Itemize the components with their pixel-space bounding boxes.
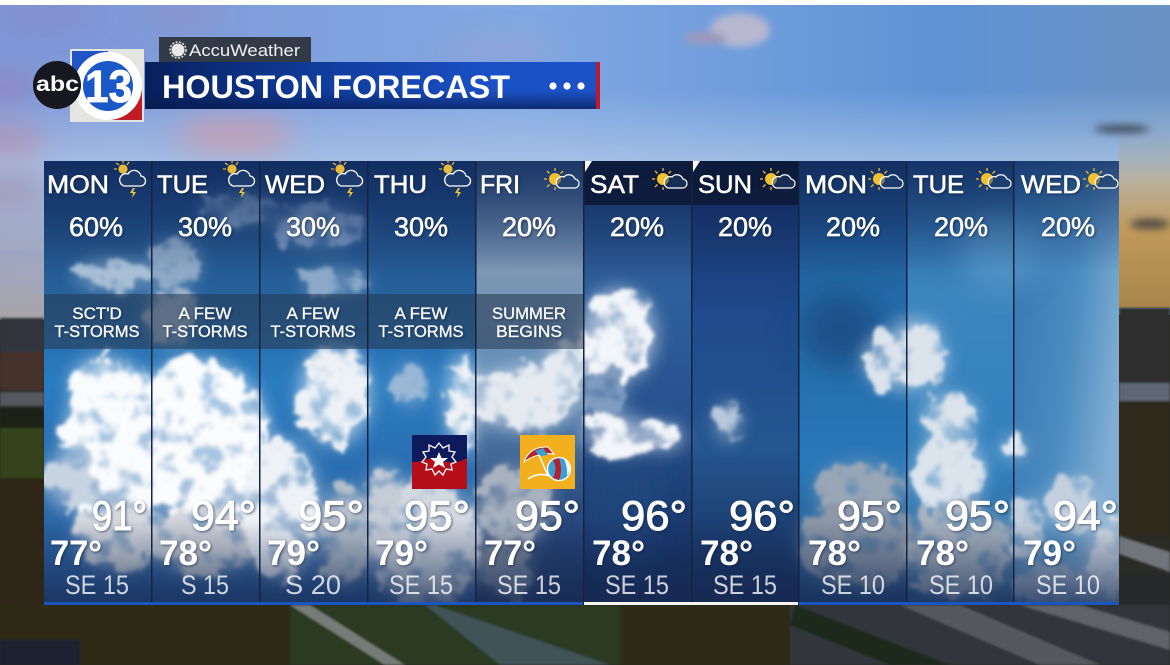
high temperatures: 95° [837, 492, 902, 539]
low temperatures: 78° [159, 534, 212, 573]
low temperatures: 79° [375, 534, 428, 573]
condition labels: T-STORMS [162, 322, 248, 341]
low temperatures: 79° [1023, 534, 1076, 573]
panel clouds [44, 161, 1124, 609]
high temperatures: 94° [1053, 492, 1118, 539]
day labels: MON [47, 171, 109, 199]
top white strip [0, 0, 1170, 5]
day labels: SAT [590, 171, 639, 199]
condition labels: T-STORMS [270, 322, 356, 341]
precipitation chances: 30% [286, 212, 340, 242]
title banner: HOUSTON FORECAST [162, 69, 510, 105]
low temperatures: 78° [592, 534, 645, 573]
abc13 logo: 13 [85, 61, 132, 112]
day labels: WED [1021, 171, 1081, 199]
condition strip background [44, 294, 583, 349]
low temperatures: 78° [700, 534, 753, 573]
abc13 logo [33, 49, 144, 122]
condition labels: T-STORMS [54, 322, 140, 341]
high temperatures: 96° [729, 492, 795, 539]
precipitation chances: 20% [610, 212, 664, 242]
condition labels: T-STORMS [378, 322, 464, 341]
day labels: FRI [480, 171, 520, 199]
condition labels [54, 304, 566, 341]
wind [65, 570, 1100, 600]
condition labels: A FEW [287, 304, 339, 323]
precipitation chances: 30% [394, 212, 448, 242]
precipitation chances: 20% [718, 212, 772, 242]
wind: SE 15 [65, 570, 129, 600]
abc13 logo: abc [36, 73, 79, 96]
low temperatures: 78° [916, 534, 969, 573]
low temperatures: 77° [484, 534, 536, 573]
low temperatures: 78° [808, 534, 861, 573]
wind: SE 10 [821, 570, 885, 600]
wind: SE 15 [389, 570, 453, 600]
precipitation chances: 60% [69, 212, 123, 242]
day labels: MON [805, 171, 867, 199]
precipitation chances: 20% [826, 212, 880, 242]
precipitation chances: 30% [178, 212, 232, 242]
low temperatures [50, 534, 1076, 573]
precipitation chances [69, 212, 1095, 242]
high temperatures: 94° [191, 492, 256, 539]
wind: SE 15 [713, 570, 777, 600]
forecast panel backgrounds [44, 161, 1119, 602]
title banner [145, 62, 600, 109]
AccuWeather tag: AccuWeather [189, 41, 300, 60]
high temperatures: 91° [92, 492, 147, 539]
condition labels: A FEW [395, 304, 447, 323]
high temperatures: 95° [945, 492, 1010, 539]
day labels: TUE [913, 171, 964, 199]
day labels [47, 171, 1081, 199]
condition labels: BEGINS [496, 322, 562, 341]
AccuWeather tag [159, 37, 311, 62]
condition labels: SCT'D [72, 304, 122, 323]
weather icons [114, 160, 1118, 198]
low temperatures: 77° [50, 534, 102, 573]
wind: SE 10 [1036, 570, 1100, 600]
day labels: THU [374, 171, 427, 199]
wind: SE 15 [497, 570, 561, 600]
condition labels: A FEW [179, 304, 231, 323]
high temperatures: 95° [404, 492, 470, 539]
high temperatures [92, 492, 1118, 539]
weekend header shading [584, 161, 798, 205]
precipitation chances: 20% [502, 212, 556, 242]
low temperatures: 79° [267, 534, 320, 573]
precipitation chances: 20% [934, 212, 988, 242]
condition labels: SUMMER [492, 304, 566, 323]
high temperatures: 95° [515, 492, 580, 539]
precipitation chances: 20% [1041, 212, 1095, 242]
high temperatures: 95° [298, 492, 364, 539]
day labels: WED [265, 171, 325, 199]
day labels: TUE [157, 171, 208, 199]
day labels: SUN [698, 171, 752, 199]
wind: SE 15 [605, 570, 669, 600]
icon: Juneteenth flag [412, 435, 467, 489]
bottom accent bars [44, 602, 1119, 605]
icon: beach umbrella and ball [520, 435, 575, 489]
column separators [151, 161, 1014, 605]
wind: SE 10 [929, 570, 993, 600]
wind: S 20 [285, 570, 341, 600]
high temperatures: 96° [621, 492, 687, 539]
wind: S 15 [181, 570, 229, 600]
